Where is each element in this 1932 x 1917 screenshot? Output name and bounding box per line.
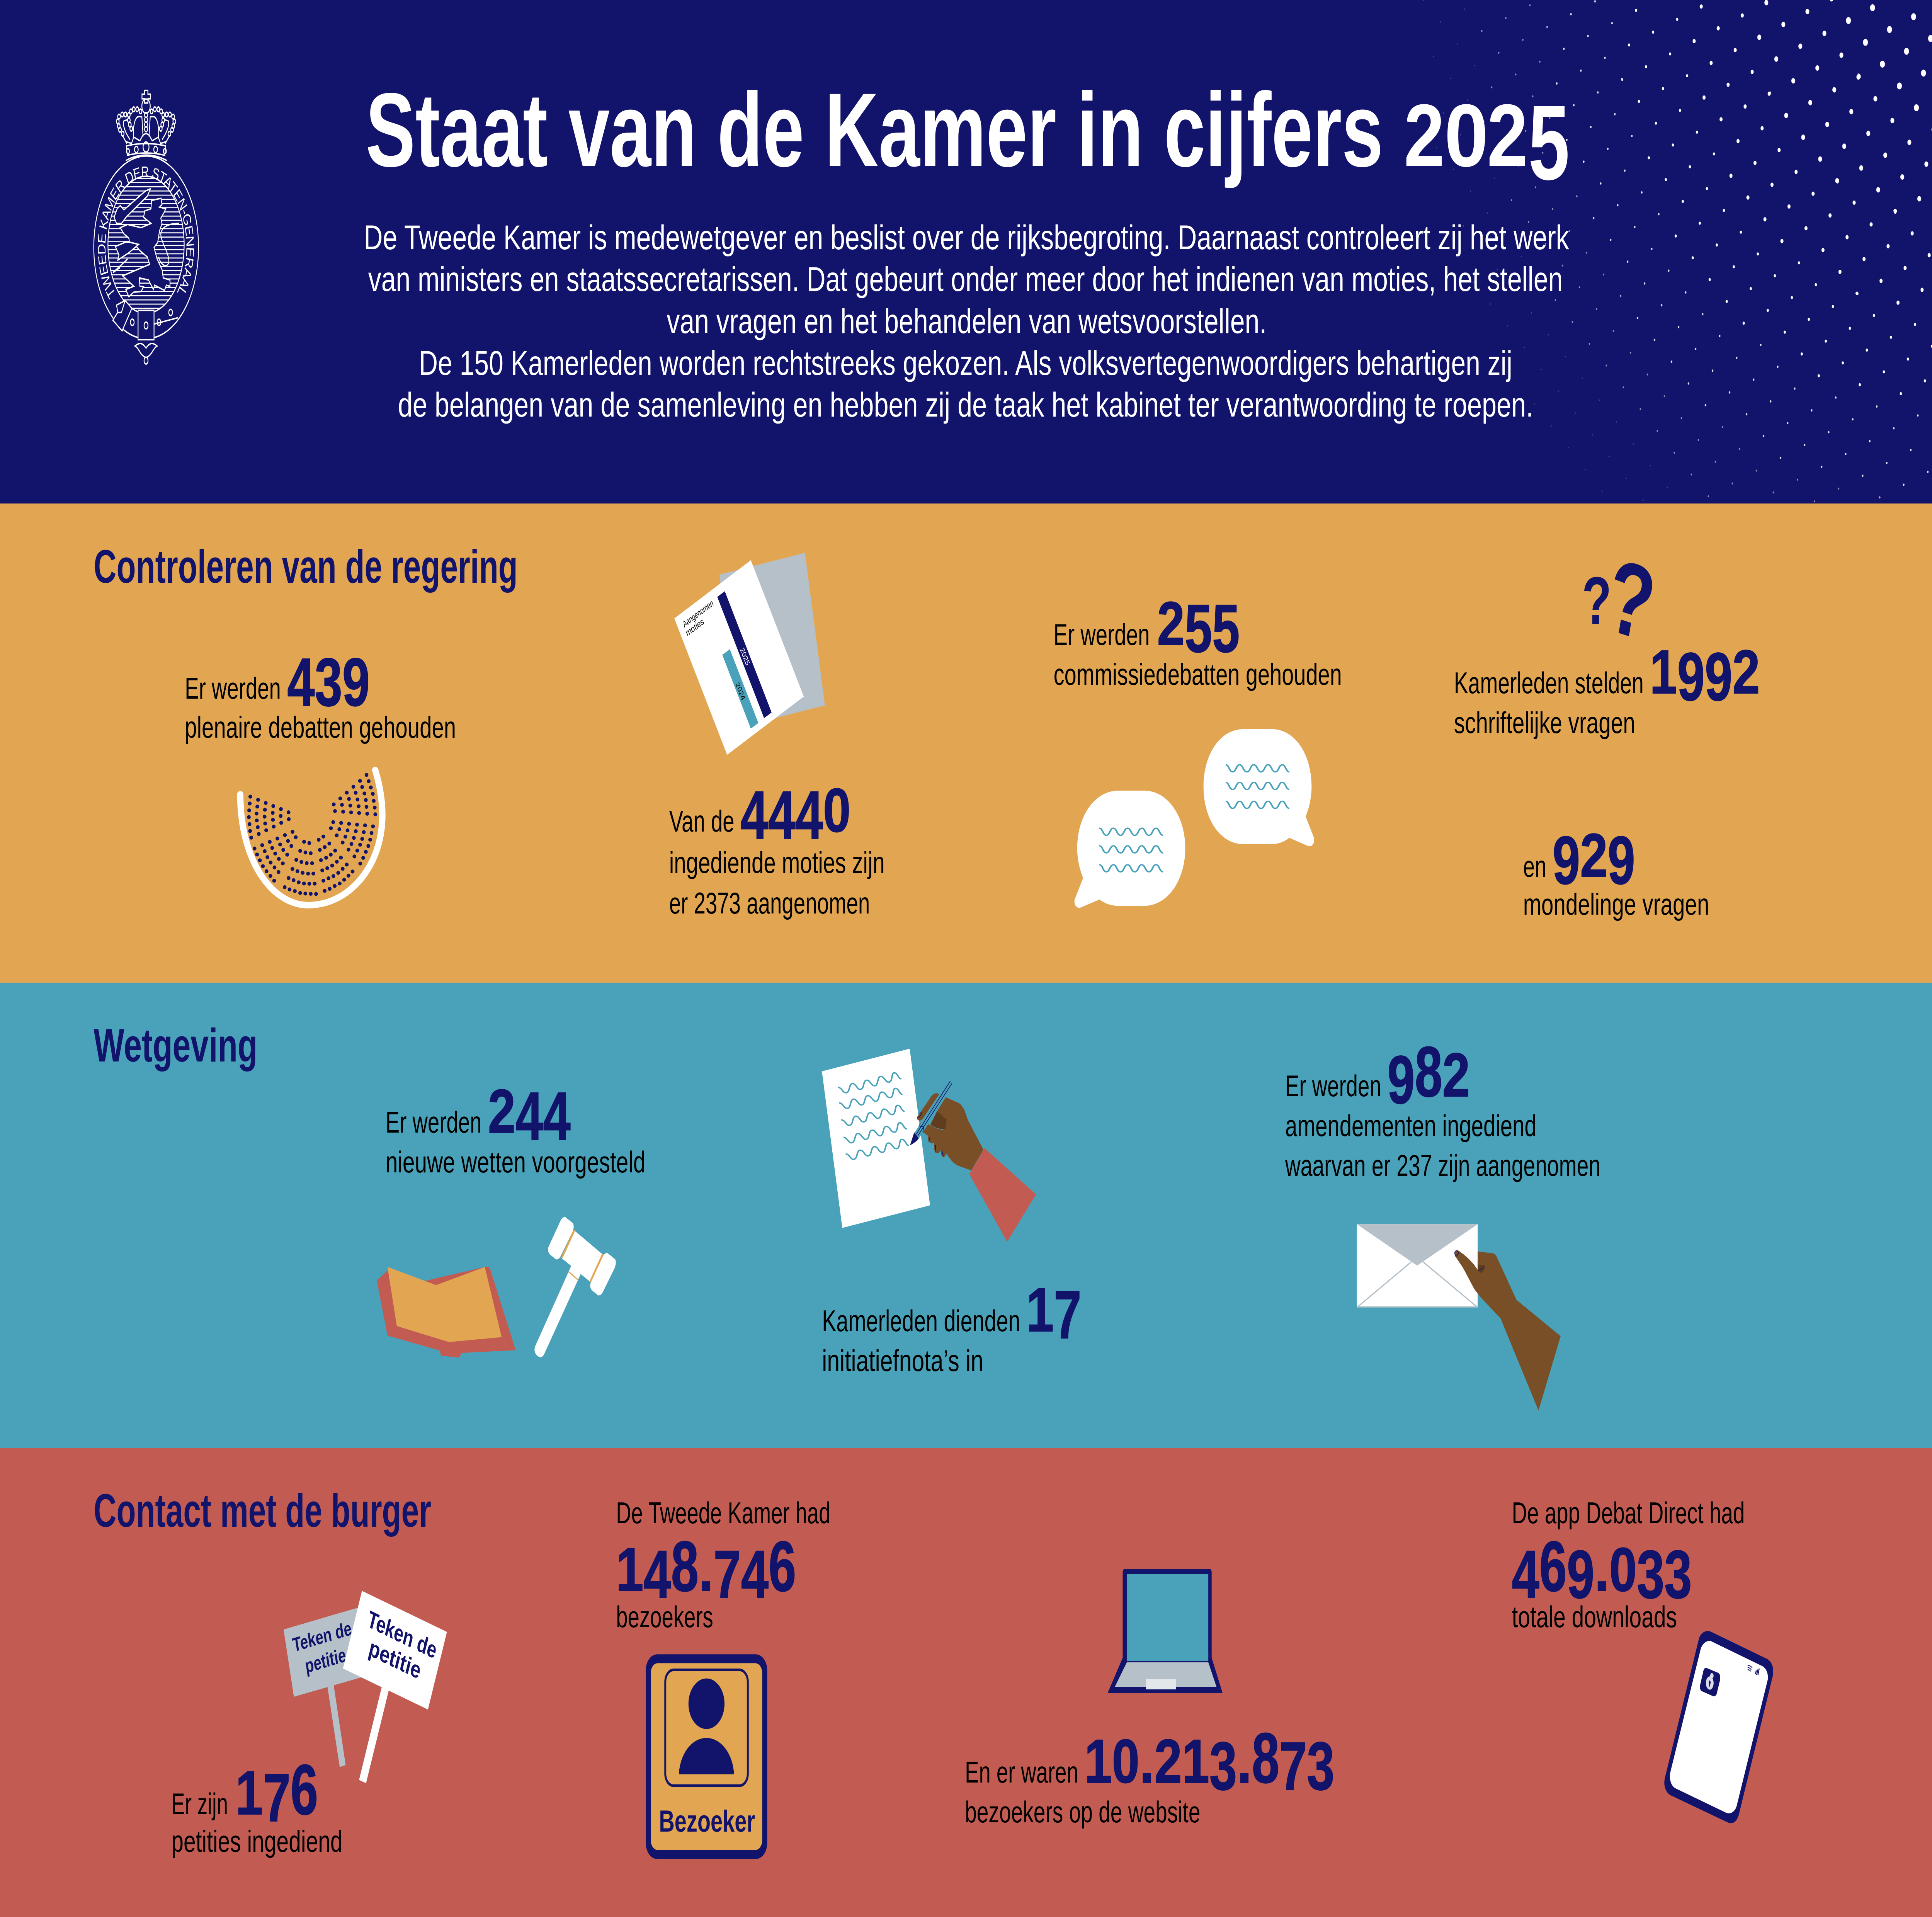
panel: wetgeving [0,983,1932,1448]
stat: website [965,1718,1335,1829]
stat: app downloads: 3 [1664,1537,1692,1613]
icon: plenary hall seats [240,770,383,905]
stat: bezoekers: De Tweede Kamer had [616,1497,830,1530]
stat: petities: 1 [235,1759,263,1828]
stat: moties: 0 [823,776,850,845]
heading: Wetgeving [94,1019,257,1072]
stat: mondelinge vragen: 2 [1580,821,1607,890]
intro text: de belangen van de samenleving en hebben zij de taak het kabinet ter verantwoording te roepen. [398,386,1533,424]
stat: amendementen [1285,1032,1600,1182]
stat: app downloads [1512,1497,1745,1634]
stat: moties: er 2373 aangenomen [669,887,870,920]
icon: phone with app [1664,1631,1773,1823]
stat: commissiedebatten: Er werden [1054,618,1150,651]
stat: amendementen: 2 [1442,1041,1470,1110]
icon: motion sheets with bar chart: 2025 [738,646,751,667]
icon: speech bubbles [1075,729,1314,908]
stat: amendementen: Er werden [1285,1070,1381,1103]
stat: plenaire debatten: 3 [315,645,342,720]
intro text [364,219,1569,424]
stat: website: 1 [1182,1727,1209,1796]
stat: bezoekers [616,1497,830,1634]
stat: app downloads: totale downloads [1512,1601,1677,1634]
stat: schriftelijke vragen: 9 [1677,639,1705,715]
stat: mondelinge vragen: 9 [1607,823,1635,898]
icon: petition signs: Teken de [291,1618,353,1656]
stat: petities: petities ingediend [171,1825,343,1858]
icon: book and gavel [377,1217,616,1357]
stat: plenaire debatten: Er werden [185,672,281,705]
icon: writing hand on paper [822,1049,1036,1242]
stat: amendementen: 9 [1387,1042,1415,1118]
stat: moties: Van de [669,805,735,838]
stat: website: 2 [1154,1727,1182,1796]
stat: website: . [1139,1727,1154,1796]
starfield dots [1423,0,1932,502]
stat: commissiedebatten [1054,589,1342,691]
stat: moties [669,776,885,920]
heading: Controleren van de regering [94,541,518,593]
panel: header [94,0,1932,502]
icon: petition signs: petitie [304,1644,347,1677]
stat: schriftelijke vragen [1454,638,1760,740]
stat: moties: ingediende moties zijn [669,846,885,879]
stat: initiatiefnota's: Kamerleden dienden [822,1305,1020,1338]
stat: initiatiefnota's: 1 [1026,1276,1054,1345]
stat: nieuwe wetten [386,1077,645,1179]
stat: schriftelijke vragen: Kamerleden stelden [1454,667,1644,700]
stat: nieuwe wetten: nieuwe wetten voorgesteld [386,1146,645,1179]
stat: amendementen: amendementen ingediend [1285,1109,1537,1143]
stat: plenaire debatten [185,645,456,744]
stat: bezoekers: bezoekers [616,1601,713,1634]
stat: petities: 6 [291,1750,318,1829]
icon: laptop [1107,1569,1223,1693]
stat: nieuwe wetten: Er werden [386,1106,481,1139]
stat: nieuwe wetten: 4 [543,1078,571,1154]
crown [116,90,176,161]
stat: app downloads: 9 [1567,1537,1594,1613]
stat: amendementen: 8 [1415,1032,1442,1111]
stat: petities: Er zijn [171,1788,228,1821]
stat: schriftelijke vragen: 9 [1705,639,1732,715]
icon: visitor badge: Bezoeker [659,1805,755,1838]
icon: petition signs [284,1591,447,1783]
stat: website: 7 [1279,1728,1307,1804]
crest: Tweede Kamer der Staten-Generaal [94,90,199,364]
stat: moties: 4 [796,777,823,853]
stat: mondelinge vragen [1523,821,1709,921]
stat: nieuwe wetten: 4 [515,1078,543,1154]
stat: website: 0 [1112,1727,1139,1796]
stat: app downloads: . [1594,1535,1609,1604]
crest: Tweede Kamer der Staten-Generaal: TWEEDE KAMER DER STATEN-GENERAAL [96,164,196,301]
stat: website: 3 [1209,1728,1237,1804]
icon: petition signs: petitie [366,1635,423,1684]
stat: plenaire debatten: 4 [287,645,315,720]
stat: plenaire debatten: 9 [342,645,370,720]
stat: mondelinge vragen: en [1523,850,1546,883]
intro text: De 150 Kamerleden worden rechtstreeks gekozen. Als volksvertegenwoordigers behartigen zij [419,344,1512,383]
stat: schriftelijke vragen: 1 [1650,638,1677,707]
stat: bezoekers: 8 [671,1526,699,1606]
stat: initiatiefnota's: initiatiefnota’s in [822,1344,983,1378]
stat: app downloads: De app Debat Direct had [1512,1497,1745,1530]
stat: initiatiefnota's [822,1276,1082,1378]
stat: commissiedebatten: commissiedebatten gehouden [1054,658,1342,691]
icon: visitor badge [646,1654,767,1859]
stat: commissiedebatten: 5 [1185,591,1212,667]
stat: plenaire debatten: plenaire debatten gehouden [185,711,456,744]
stat: commissiedebatten: 2 [1157,589,1185,658]
icon: hand with envelope [1357,1224,1561,1410]
stat: website: En er waren [965,1756,1078,1789]
stat: schriftelijke vragen: schriftelijke vragen [1454,706,1635,740]
stat: moties: 4 [768,777,796,853]
stat: website: 8 [1252,1718,1279,1798]
stat: website: 1 [1084,1727,1112,1796]
icon: motion sheets with bar chart: 2024 [734,681,747,702]
title: Staat van de Kamer in cijfers [366,71,1383,189]
icon: question marks: ? [1600,536,1663,664]
icon: motion sheets with bar chart: Aangenomen [682,598,714,629]
stat: bezoekers: 1 [616,1535,643,1604]
stat: mondelinge vragen: mondelinge vragen [1523,888,1709,921]
heading: Contact met de burger [94,1485,431,1537]
intro text: De Tweede Kamer is medewetgever en beslist over de rijksbegroting. Daarnaast controleert zij het werk [364,219,1569,257]
icon: motion sheets with bar chart: moties [685,616,705,638]
stat: nieuwe wetten: 2 [488,1077,515,1146]
stat: bezoekers: 4 [643,1537,671,1613]
title: 5 [1528,83,1570,202]
stat: bezoekers: 6 [769,1526,796,1606]
stat: commissiedebatten: 5 [1212,591,1240,667]
stat: bezoekers: 4 [741,1537,769,1613]
stat: petities [171,1750,343,1858]
stat: moties: 4 [740,777,768,853]
title: 2 [1487,86,1528,185]
title: 2 [1404,86,1445,185]
stat: app downloads: 3 [1637,1537,1664,1613]
stat: app downloads: 6 [1539,1526,1567,1606]
intro text: van vragen en het behandelen van wetsvoorstellen. [667,303,1267,341]
stat: website: 3 [1307,1728,1335,1804]
icon: motion sheets with bar chart [674,553,825,755]
panel: controleren van de regering [0,503,1932,983]
intro text: van ministers en staatssecretarissen. Dat gebeurt onder meer door het indienen van moties, het stellen [368,260,1563,299]
stat: website: bezoekers op de website [965,1796,1200,1829]
panel: contact met de burger [0,1448,1932,1917]
stat: initiatiefnota's: 7 [1054,1277,1082,1353]
stat: app downloads: 4 [1512,1537,1539,1613]
stat: app downloads: 0 [1609,1535,1637,1604]
stat: bezoekers: 7 [713,1537,741,1613]
stat: schriftelijke vragen: 2 [1732,638,1760,707]
stat: amendementen: waarvan er 237 zijn aangenomen [1285,1149,1600,1182]
icon: petition signs: Teken de [365,1606,439,1664]
title: 0 [1444,86,1488,185]
stat: mondelinge vragen: 9 [1553,823,1580,898]
stat: website: . [1237,1727,1252,1796]
icon: question marks: ? [1582,563,1611,639]
stat: bezoekers: . [699,1535,713,1604]
stat: petities: 7 [263,1760,291,1836]
